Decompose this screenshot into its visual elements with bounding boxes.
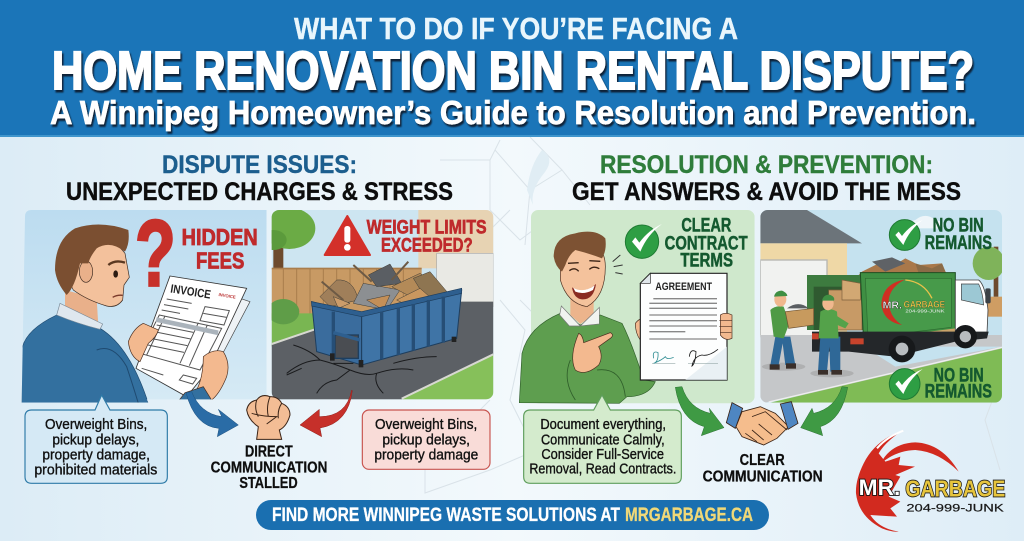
heading: resolution and prevention [572,151,961,206]
truck logo [881,279,945,325]
invoice document [136,276,250,397]
clear contract label: TERMS [680,251,733,272]
panel: weight limits exceeded [260,208,493,399]
callout: resolution tips [524,395,681,483]
hidden fees label [182,228,257,269]
left half illustrations and callouts [20,201,493,492]
callout: right issues [362,410,490,469]
no bin remains lower label [925,368,992,398]
logo: Mr. Garbage: 204-999-JUNK [906,503,1004,515]
clear contract label [665,216,748,272]
truck logo: 204-999-JUNK [905,309,945,314]
callout: resolution tips: Communicate Calmly, [541,431,665,448]
agreement document [640,273,732,380]
footer link pill: MRGARBAGE.CA [625,504,753,526]
callout: left issues: pickup delays, [52,431,139,448]
icon: overfilled blue bin [312,262,462,367]
heading: dispute issues: UNEXPECTED CHARGES & STRESS [66,178,453,206]
heading: dispute issues: DISPUTE ISSUES: [162,151,357,179]
no bin remains upper label [925,218,992,250]
icon: upper check badge [889,220,923,250]
callout: resolution tips: Removal, Read Contracts. [529,461,676,478]
truck logo: MR. [883,300,902,311]
scene: house and driveway [760,210,1005,403]
icon: smiling man pointing [519,232,655,403]
weight limits label [366,220,486,252]
callout: resolution tips: Document everything, [540,416,666,433]
logo: Mr. Garbage: GARBAGE [905,475,1005,501]
title line 1: WHAT TO DO IF YOU’RE FACING A [294,11,738,46]
heading: resolution and prevention: RESOLUTION & PREVENTION: [600,151,933,179]
icon: green Mr. Garbage truck [807,257,991,362]
icon: check badge [625,224,662,258]
callout: right issues: Overweight Bins, [375,416,477,433]
no bin remains upper label: REMAINS [925,233,992,254]
hidden fees label: HIDDEN [182,224,258,250]
clear contract label: CONTRACT [665,233,748,254]
clear communication [703,452,823,486]
subtitle: A Winnipeg Homeowner’s Guide to Resolution and Prevention. [50,94,976,131]
no bin remains lower label: REMAINS [925,382,992,403]
callout: left issues: Overweight Bins, [45,416,147,433]
icon: red question mark: ? [135,201,176,305]
panel: no bin remains [760,210,1005,403]
agreement document: AGREEMENT [655,281,712,293]
panel: hidden fees [20,201,267,403]
heading: dispute issues [66,151,453,206]
background map of Winnipeg [425,137,1000,493]
right half illustrations and callouts [519,210,1005,532]
invoice document: INVOICE [218,292,236,300]
callout: resolution tips: Consider Full-Service [541,446,664,463]
direct communication stalled: STALLED [239,475,298,492]
clear communication: COMMUNICATION [703,469,823,486]
callout: right issues: pickup delays, [382,431,470,448]
scene: yard and driveway [260,208,493,399]
arrow: right green [801,387,848,436]
cracked pavement [287,345,437,393]
icon: hands and cuff [128,323,228,403]
icon: warning triangle [325,216,370,255]
no bin remains lower label: NO BIN [934,366,984,387]
weight limits label: WEIGHT LIMITS [367,217,487,238]
arrow: left green [675,387,724,436]
icon: fist [247,396,290,439]
truck logo: GARBAGE [904,299,945,309]
weight limits label: EXCEEDED? [381,236,473,257]
panel: clear contract [519,210,755,403]
callout: left issues [25,395,167,483]
clear contract label: CLEAR [681,216,732,237]
invoice document: INVOICE [170,281,212,302]
direct communication stalled: DIRECT [245,444,293,461]
header band [0,0,1024,137]
hidden fees label: FEES [196,247,244,273]
arrow: red [300,390,352,437]
no bin remains upper label: NO BIN [933,216,984,237]
footer link pill: FIND MORE WINNIPEG WASTE SOLUTIONS AT [272,504,620,526]
logo: Mr. Garbage: MR. [859,475,900,500]
footer link pill [256,500,769,530]
arrow: blue [186,392,238,437]
direct communication stalled: COMMUNICATION [211,460,327,477]
heading: resolution and prevention: GET ANSWERS & AVOID THE MESS [572,178,961,206]
icon: lower check badge [889,369,923,399]
logo: Mr. Garbage [856,430,1005,532]
clear communication: CLEAR [740,452,785,469]
icon: handshake [726,402,798,445]
callout: left issues: property damage, [42,446,150,463]
callout: right issues: property damage [374,446,478,463]
direct communication stalled [211,444,327,492]
icon: box and workers [762,291,854,377]
icon: worried man [22,225,148,403]
callout: left issues: prohibited materials [34,461,157,478]
